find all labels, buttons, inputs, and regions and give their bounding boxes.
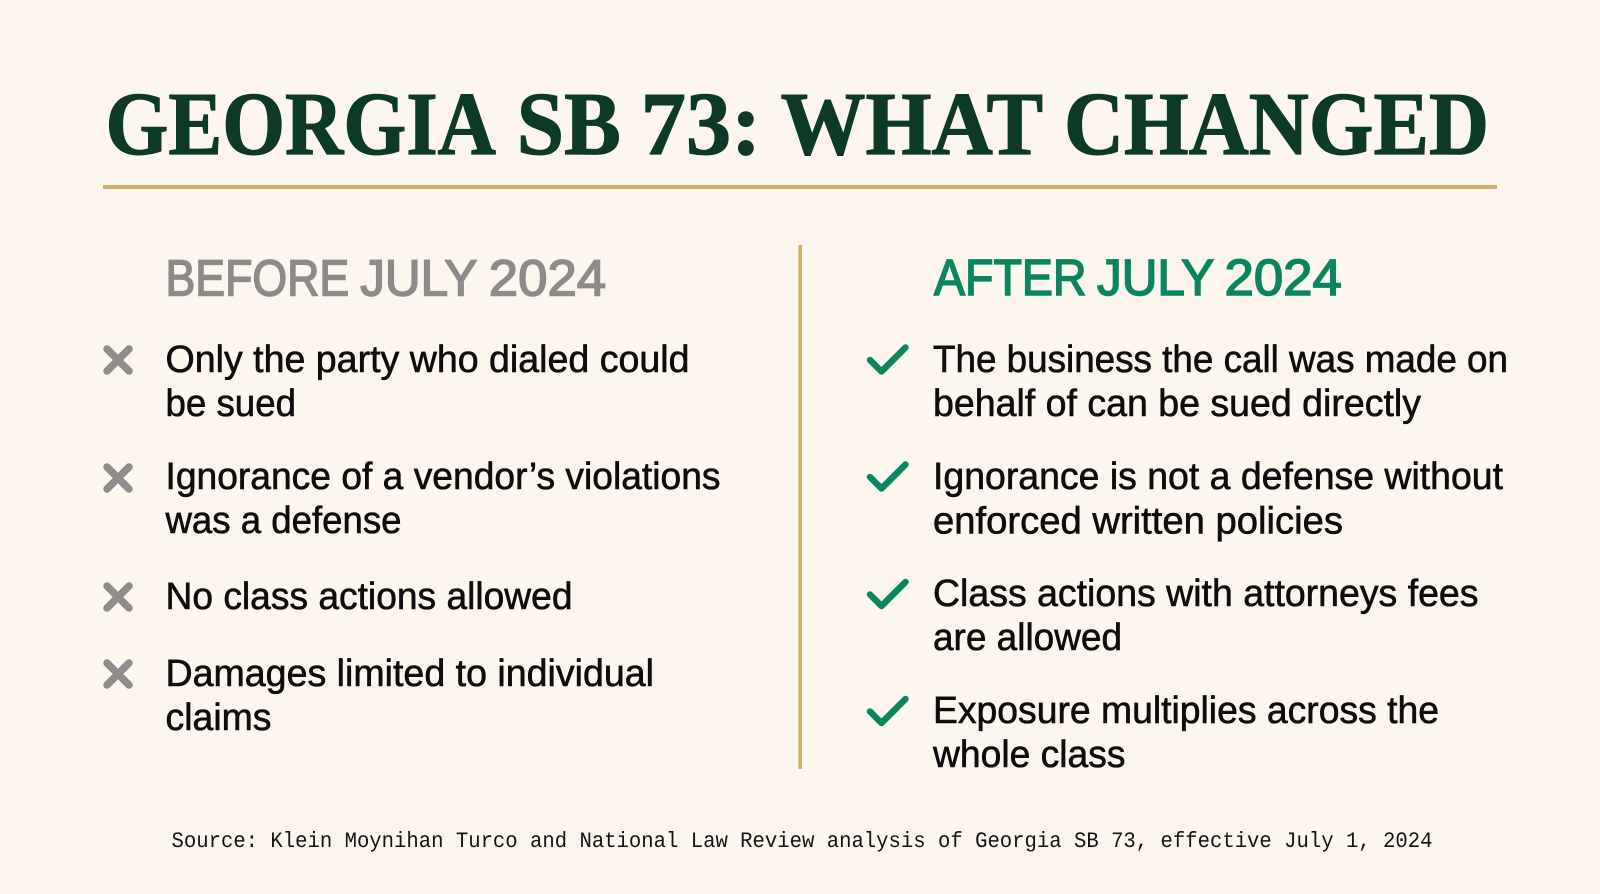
item: ignorance of vendor violations bbox=[107, 456, 720, 542]
icon: check mark bbox=[870, 348, 906, 372]
item text: Ignorance of a vendor’s violations bbox=[166, 456, 720, 498]
icon: x mark bbox=[107, 349, 129, 371]
center divider bbox=[798, 245, 802, 769]
heading: after: 2024 bbox=[1224, 249, 1342, 306]
item text: Only the party who dialed could bbox=[166, 339, 690, 381]
heading: after: AFTER bbox=[934, 249, 1086, 306]
item text: Ignorance is not a defense without bbox=[933, 456, 1503, 498]
item text: Exposure multiplies across the bbox=[933, 690, 1439, 732]
icon: x mark bbox=[107, 663, 129, 685]
icon: check mark bbox=[870, 464, 906, 488]
heading: before: JULY bbox=[360, 250, 476, 306]
title: SB bbox=[517, 75, 621, 174]
item: business can be sued bbox=[870, 339, 1508, 425]
item text: No class actions allowed bbox=[166, 576, 572, 618]
heading: before: BEFORE bbox=[166, 250, 349, 306]
item text: whole class bbox=[932, 734, 1126, 776]
icon: check mark bbox=[870, 699, 906, 723]
title: GEORGIA bbox=[106, 75, 496, 174]
panel: before July 2024 bbox=[107, 250, 720, 739]
item: only the party who dialed bbox=[107, 339, 690, 425]
item: exposure multiplies bbox=[870, 690, 1439, 776]
item: class actions allowed bbox=[870, 573, 1478, 659]
item text: Damages limited to individual bbox=[166, 653, 654, 695]
item: no class actions bbox=[107, 576, 572, 618]
panel: after July 2024 bbox=[870, 249, 1508, 776]
item text: The business the call was made on bbox=[933, 339, 1508, 381]
item text: was a defense bbox=[165, 500, 402, 542]
item: damages limited bbox=[107, 653, 654, 739]
title underline bbox=[103, 185, 1497, 189]
item text: behalf of can be sued directly bbox=[933, 383, 1421, 425]
item text: are allowed bbox=[933, 617, 1122, 659]
icon: x mark bbox=[107, 586, 129, 608]
source note: Source: Klein Moynihan Turco and National Law Review analysis of Georgia SB 73, effective July 1, 2024 bbox=[172, 829, 1432, 854]
title: WHAT bbox=[781, 75, 1042, 174]
icon: x mark bbox=[107, 467, 129, 489]
item text: claims bbox=[166, 697, 272, 739]
item text: enforced written policies bbox=[933, 500, 1343, 542]
item: ignorance is not a defense bbox=[870, 456, 1503, 542]
title: CHANGED bbox=[1064, 75, 1489, 174]
item text: Class actions with attorneys fees bbox=[933, 573, 1478, 615]
title: 73: bbox=[641, 75, 761, 174]
heading: before: 2024 bbox=[489, 250, 606, 306]
icon: check mark bbox=[870, 582, 906, 606]
item text: be sued bbox=[166, 383, 296, 425]
heading: after: JULY bbox=[1097, 249, 1213, 306]
